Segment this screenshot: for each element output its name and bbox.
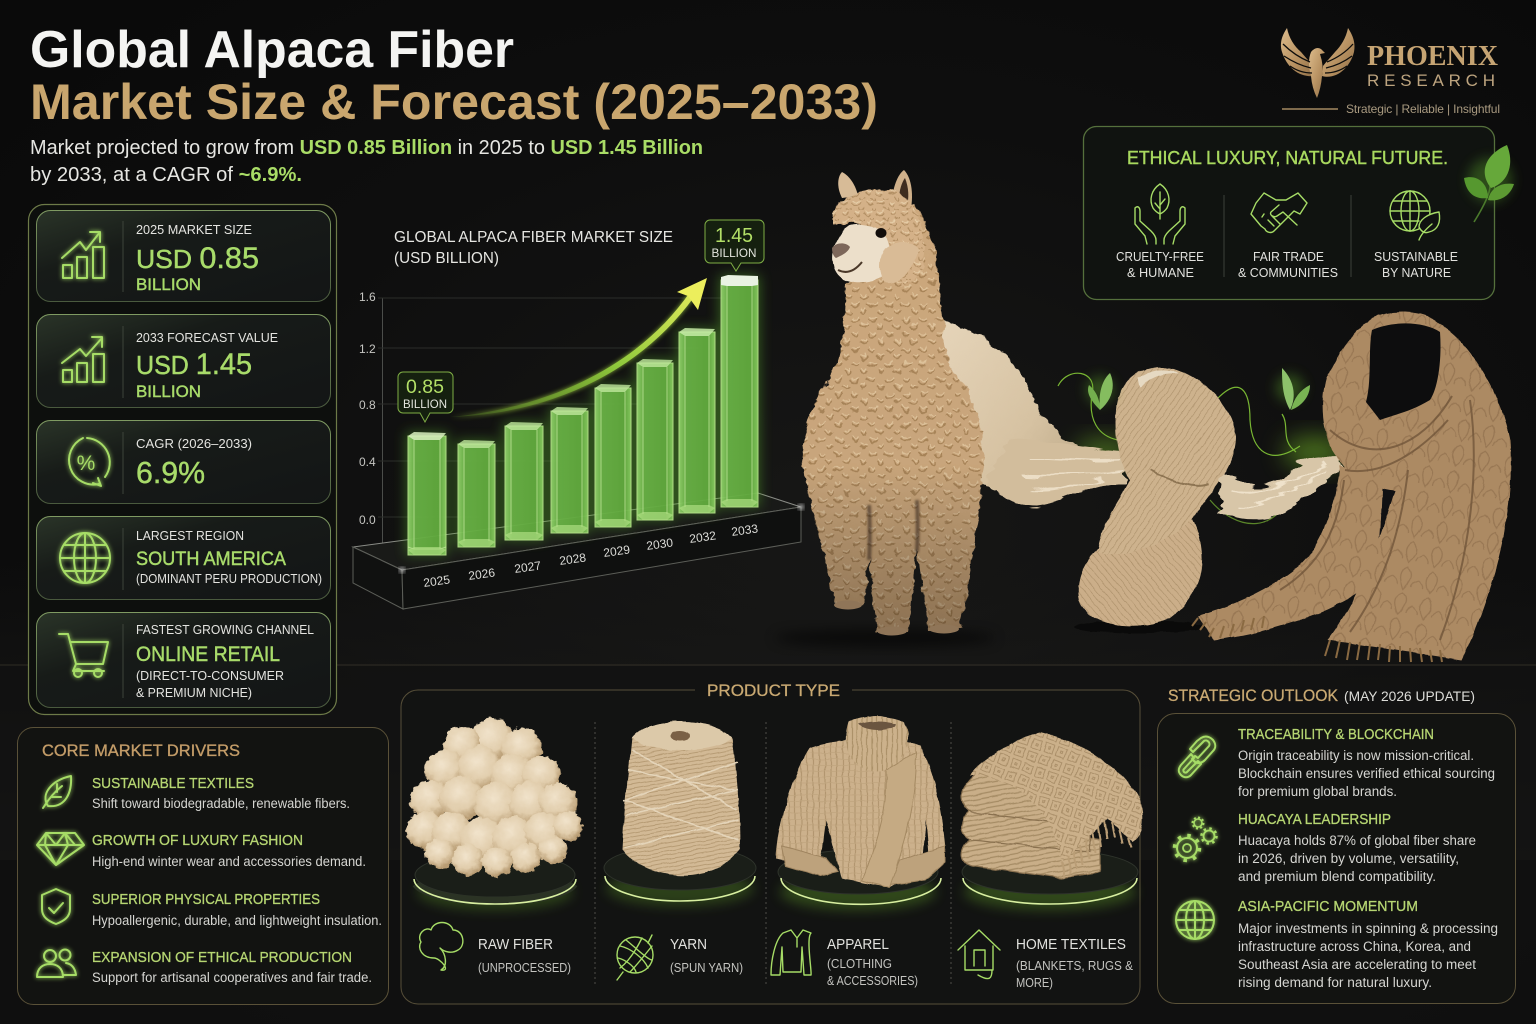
bars glow [406, 275, 760, 555]
metric card: fastest channel: ONLINE RETAIL [136, 643, 280, 666]
icon: shopping cart [59, 634, 108, 677]
yarn floor shadow [1074, 621, 1206, 633]
blanket top fold [970, 732, 1143, 862]
wordmark subtitle: RESEARCH [1367, 71, 1495, 90]
label: yarn: (SPUN YARN) [670, 961, 743, 975]
bar: 2025 [408, 432, 446, 555]
label: home textiles: MORE) [1016, 976, 1053, 990]
icon: shirt [771, 930, 811, 975]
outlook: traceability [1179, 726, 1495, 799]
scarf right drape [1323, 312, 1511, 660]
outlook: traceability: Origin traceability is now mission-critical. [1238, 748, 1474, 763]
year labels: 2027 [513, 558, 542, 576]
metric card: 2025 market size: BILLION [136, 275, 201, 294]
bar: 2026 [458, 440, 495, 547]
icon: forecast bars [62, 337, 104, 382]
outlook: asia-pacific momentum: rising demand for natural luxury. [1238, 975, 1432, 990]
icon: shield [42, 889, 70, 924]
driver: sustainable textiles: SUSTAINABLE TEXTILES [92, 775, 254, 792]
icon: percent ring [69, 438, 110, 486]
outlook: huacaya leadership: and premium blend compatibility. [1238, 869, 1436, 884]
metric card: CAGR: CAGR (2026–2033) [136, 437, 252, 451]
driver: physical properties [42, 889, 382, 928]
callout: 1.45 billion: BILLION [712, 248, 756, 260]
pedestal: home textiles [962, 850, 1138, 910]
icon: diamond [37, 833, 84, 865]
metric card: fastest channel [36, 612, 330, 708]
alpaca fiber stream [986, 440, 1125, 506]
icon: globe [60, 533, 110, 583]
panel: key metrics [28, 204, 336, 714]
label: sustainable [1374, 249, 1458, 280]
bar: 2029 [595, 384, 631, 527]
subtitle: by 2033, at a CAGR of ~6.9%. [30, 164, 302, 186]
bar: 2028 [551, 407, 588, 533]
scarf fringe [1192, 616, 1442, 662]
icon: handshake [1251, 193, 1307, 232]
yarn upper loop and twist [1097, 367, 1236, 554]
driver: physical properties: Hypoallergenic, durable, and lightweight insulation. [92, 913, 382, 928]
icon: gears [1174, 818, 1216, 860]
icon: floating leaf right [1276, 368, 1310, 410]
outlook: asia-pacific momentum: Major investments in spinning & processing [1238, 921, 1498, 936]
outlook: traceability: Blockchain ensures verified ethical sourcing [1238, 766, 1495, 781]
bar chart: market size [353, 220, 803, 609]
icon: growth bars [62, 232, 104, 278]
label: home textiles: (BLANKETS, RUGS & [1016, 959, 1134, 973]
driver: luxury fashion: High-end winter wear and accessories demand. [92, 854, 366, 869]
subtitle [30, 137, 703, 186]
alpaca fleece back [936, 322, 1080, 505]
product: raw fiber tuft [406, 718, 583, 877]
y axis: 0.8 [359, 398, 376, 412]
y axis: 1.2 [359, 342, 376, 356]
outlook: asia-pacific momentum: ASIA-PACIFIC MOMENTUM [1238, 898, 1418, 915]
icon: globe with leaf [1390, 191, 1440, 240]
y axis: 0.0 [359, 513, 376, 527]
illustration: fiber flow lines [1058, 373, 1347, 524]
metric card: largest region: (DOMINANT PERU PRODUCTION) [136, 572, 322, 586]
wordmark: PHOENIX [1367, 40, 1498, 72]
driver: luxury fashion: GROWTH OF LUXURY FASHION [92, 832, 303, 849]
scarf fibre stream [1218, 456, 1340, 521]
panel heading: ETHICAL LUXURY, NATURAL FUTURE. [1127, 148, 1448, 168]
callout: 1.45 billion [705, 220, 764, 271]
icon: globe [1176, 901, 1214, 939]
outlook: huacaya leadership: Huacaya holds 87% of global fiber share [1238, 833, 1476, 848]
illustration: yarn skein [1074, 367, 1236, 633]
product: yarn cone [622, 722, 740, 875]
year labels: 2025 [422, 572, 451, 590]
year labels: 2029 [602, 542, 631, 560]
outlook: asia-pacific momentum [1176, 898, 1498, 990]
outlook: asia-pacific momentum: Southeast Asia are accelerating to meet [1238, 957, 1476, 972]
metric card: CAGR [36, 420, 330, 504]
metric card: fastest channel: FASTEST GROWING CHANNEL [136, 623, 314, 637]
year labels: 2032 [688, 528, 717, 546]
label: sustainable: BY NATURE [1382, 265, 1451, 280]
outlook: asia-pacific momentum: infrastructure across China, Korea, and [1238, 939, 1471, 954]
illustration: alpaca [775, 170, 1125, 647]
year labels: 2026 [467, 565, 496, 583]
icon: yarn ball [617, 935, 653, 980]
label: apparel [771, 930, 918, 988]
growth arrow [450, 278, 707, 417]
label: home textiles [958, 930, 1134, 990]
metric card: largest region [36, 516, 330, 600]
heading: strategic outlook: STRATEGIC OUTLOOK [1168, 686, 1339, 705]
chart title [394, 229, 673, 267]
chart title: GLOBAL ALPACA FIBER MARKET SIZE [394, 229, 673, 246]
outlook: huacaya leadership: HUACAYA LEADERSHIP [1238, 811, 1391, 828]
outlook: traceability: for premium global brands. [1238, 784, 1397, 799]
icon: leaf sprig [1464, 145, 1514, 222]
label: apparel: (CLOTHING [827, 957, 892, 971]
scarf stand [1372, 480, 1412, 601]
driver: ethical production: EXPANSION OF ETHICAL PRODUCTION [92, 949, 352, 966]
title [30, 21, 878, 130]
bar: 2032 [679, 328, 715, 513]
y axis: 0.4 [359, 455, 376, 469]
alpaca ears [838, 170, 912, 214]
label: fair trade [1238, 249, 1338, 280]
icon: hands holding leaf [1135, 184, 1185, 244]
product: folded blanket [962, 732, 1143, 878]
metric card: 2033 forecast [36, 314, 330, 408]
pedestal: yarn [604, 846, 756, 906]
icon: house [958, 930, 1000, 979]
blanket fringe [1062, 821, 1131, 878]
scarf opening [1366, 323, 1441, 420]
y axis: 1.6 [359, 290, 376, 304]
driver: sustainable textiles [43, 775, 350, 811]
metric card: largest region: LARGEST REGION [136, 529, 244, 543]
callout: 0.85 billion: 0.85 [406, 377, 444, 398]
label: sustainable: SUSTAINABLE [1374, 249, 1458, 264]
alpaca body, neck and legs [804, 205, 983, 632]
metric card: largest region: SOUTH AMERICA [136, 548, 286, 570]
icon: leaf [43, 776, 71, 808]
bar: 2027 [505, 422, 543, 540]
icon: floating leaf left [1086, 373, 1114, 410]
title: Market Size & Forecast (2025–2033) [30, 74, 878, 130]
label: raw fiber: (UNPROCESSED) [478, 961, 571, 975]
alpaca floor shadow [775, 629, 995, 647]
y axis [359, 290, 725, 552]
panel: ethical luxury [1084, 126, 1514, 300]
label: raw fiber: RAW FIBER [478, 937, 553, 953]
pedestal: apparel [778, 850, 941, 910]
alpaca nose and mouth [832, 243, 862, 272]
year labels [422, 521, 759, 590]
alpaca face [832, 224, 890, 282]
label: cruelty-free: CRUELTY-FREE [1116, 249, 1204, 264]
metric card: 2025 market size: 2025 MARKET SIZE [136, 223, 252, 237]
alpaca hooves [834, 600, 959, 636]
logo: Phoenix Research [1281, 28, 1500, 116]
chart title: (USD BILLION) [394, 250, 499, 267]
title: Global Alpaca Fiber [30, 21, 514, 79]
label: home textiles: HOME TEXTILES [1016, 937, 1126, 953]
metric card: 2033 forecast: BILLION [136, 382, 201, 401]
metric card: 2025 market size: USD 0.85 [136, 242, 259, 275]
pedestal: raw fiber [414, 853, 576, 910]
icon: phoenix [1281, 28, 1355, 98]
icon: people [37, 950, 76, 977]
label: apparel: APPAREL [827, 937, 889, 953]
icon: cotton cloud [420, 922, 463, 970]
metric card: CAGR: 6.9% [136, 455, 205, 490]
driver: physical properties: SUPERIOR PHYSICAL PROPERTIES [92, 891, 320, 908]
alpaca jowl wool [880, 242, 918, 283]
panel: core market drivers [18, 728, 388, 1004]
label: cruelty-free [1116, 249, 1204, 280]
label: cruelty-free: & HUMANE [1127, 265, 1194, 280]
label: fair trade: & COMMUNITIES [1238, 265, 1338, 280]
label: raw fiber [420, 922, 571, 975]
illustration: scarf on stand [1192, 312, 1511, 662]
icon: percent ring: % [77, 452, 95, 475]
year labels: 2028 [558, 550, 587, 568]
alpaca leg separations [869, 500, 918, 560]
panel: product type [401, 681, 1143, 1004]
bar: 2033 [721, 275, 758, 507]
callout: 1.45 billion: 1.45 [715, 225, 753, 247]
driver: ethical production: Support for artisanal cooperatives and fair trade. [92, 970, 372, 985]
metric card: 2033 forecast: 2033 FORECAST VALUE [136, 331, 278, 345]
metric card: fastest channel: & PREMIUM NICHE) [136, 686, 252, 700]
alpaca eye [876, 228, 886, 238]
panel heading: PRODUCT TYPE [707, 681, 840, 700]
product: sweater [776, 716, 946, 888]
callout: 0.85 billion: BILLION [403, 399, 447, 411]
driver: sustainable textiles: Shift toward biodegradable, renewable fibers. [92, 796, 350, 811]
driver: ethical production [37, 949, 372, 985]
metric card: 2033 forecast: USD 1.45 [136, 348, 252, 381]
tagline: Strategic | Reliable | Insightful [1346, 102, 1500, 116]
outlook: huacaya leadership: in 2026, driven by volume, versatility, [1238, 851, 1459, 866]
label: fair trade: FAIR TRADE [1253, 249, 1324, 264]
yarn lower coil [1078, 518, 1202, 626]
label: yarn: YARN [670, 937, 707, 953]
bar: 2030 [637, 359, 673, 520]
panel: strategic outlook [1158, 714, 1516, 1004]
label: yarn [617, 935, 743, 980]
heading: strategic outlook [1168, 686, 1475, 705]
scarf left drape [1198, 465, 1382, 640]
year labels: 2030 [645, 535, 674, 553]
year labels: 2033 [730, 521, 759, 539]
scarf fold shading [1280, 396, 1474, 640]
metric card: 2025 market size [36, 210, 330, 302]
icon: chain link [1179, 737, 1215, 777]
alpaca head wool [832, 189, 926, 286]
driver: luxury fashion [37, 832, 366, 869]
heading: strategic outlook: (MAY 2026 UPDATE) [1344, 688, 1475, 704]
panel heading: CORE MARKET DRIVERS [42, 741, 240, 760]
subtitle: Market projected to grow from USD 0.85 Billion in 2025 to USD 1.45 Billion [30, 137, 703, 159]
label: apparel: & ACCESSORIES) [827, 974, 918, 988]
yarn highlight [1138, 370, 1180, 388]
glass platform [353, 493, 803, 609]
metric card: fastest channel: (DIRECT-TO-CONSUMER [136, 669, 284, 683]
blanket rolls [962, 768, 1100, 878]
outlook: huacaya leadership [1174, 811, 1476, 884]
outlook: traceability: TRACEABILITY & BLOCKCHAIN [1238, 726, 1434, 743]
callout: 0.85 billion [398, 372, 453, 422]
